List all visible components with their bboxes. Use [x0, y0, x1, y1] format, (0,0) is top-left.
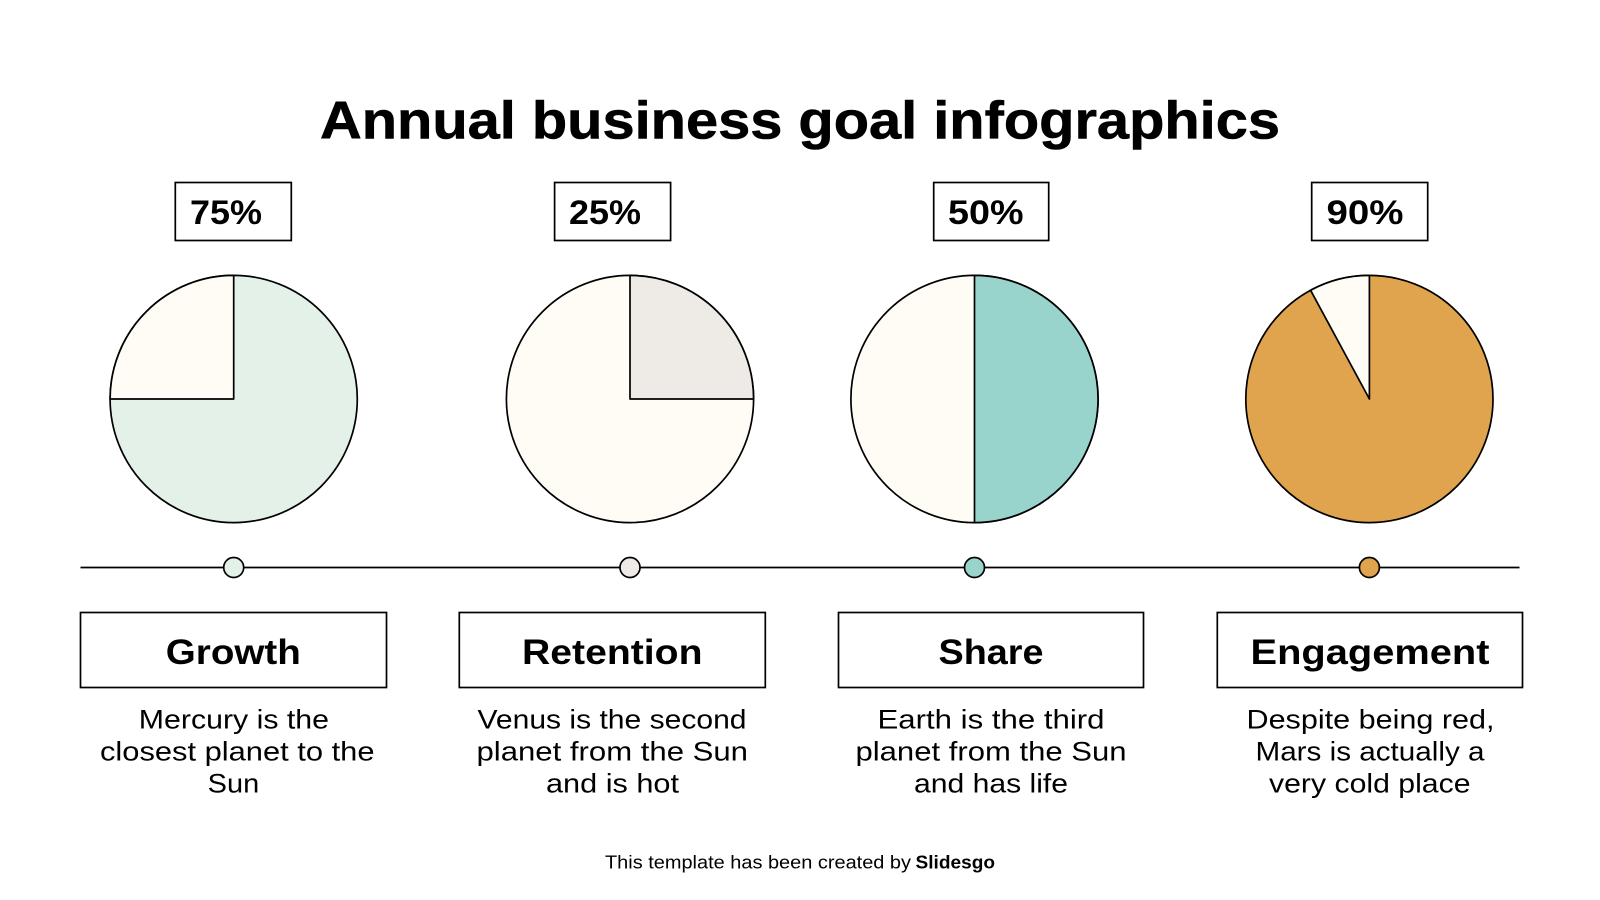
description: Venus: Venus is the second [478, 704, 746, 734]
label: Share [838, 612, 1144, 688]
percent badge: 25%: 25% [569, 194, 641, 232]
description: Mars [1246, 704, 1494, 798]
timeline [80, 558, 1520, 578]
label: Retention [459, 612, 765, 688]
description: Mercury: Mercury is the [139, 704, 329, 734]
panel: share [838, 182, 1144, 798]
label: Engagement: Engagement [1250, 633, 1490, 672]
label: Engagement [1217, 612, 1522, 688]
label: Growth [80, 612, 386, 688]
percent badge: 90% [1312, 182, 1428, 240]
marker: retention [620, 558, 640, 578]
marker: growth [224, 558, 244, 578]
description: Earth [856, 704, 1126, 798]
pie chart: 90% [1246, 275, 1493, 523]
description: Mercury [100, 704, 374, 798]
description: Venus: and is hot [546, 768, 680, 798]
description: Earth: Earth is the third [878, 704, 1104, 734]
percent badge: 50%: 50% [948, 194, 1024, 232]
percent badge: 75% [175, 182, 291, 240]
label: Share: Share [938, 633, 1044, 672]
marker: share [964, 558, 984, 578]
description: Earth: planet from the Sun [856, 736, 1126, 766]
description: Mars: very cold place [1269, 768, 1470, 798]
panel: retention [459, 182, 765, 798]
label: Retention: Retention [522, 633, 702, 672]
footer credit: This template has been created by [605, 852, 911, 872]
description: Venus [476, 704, 748, 798]
description: Venus: planet from the Sun [476, 736, 748, 766]
percent badge: 90%: 90% [1326, 194, 1404, 232]
description: Mercury: Sun [208, 768, 259, 798]
description: Earth: and has life [914, 768, 1068, 798]
pie chart: 50% [851, 275, 1098, 523]
pie chart: 25% [506, 275, 754, 523]
description: Mercury: closest planet to the [100, 736, 374, 766]
percent badge: 25% [555, 182, 671, 240]
footer credit: Slidesgo [916, 852, 995, 872]
percent badge: 50% [934, 182, 1049, 240]
description: Mars: Mars is actually a [1256, 736, 1486, 766]
description: Mars: Despite being red, [1246, 704, 1494, 734]
label: Growth: Growth [166, 633, 301, 672]
percent badge: 75%: 75% [190, 194, 262, 232]
panel: engagement [1217, 182, 1522, 798]
title: Annual business goal infographics [320, 92, 1280, 150]
marker: engagement [1359, 558, 1379, 578]
pie chart: 75% [110, 275, 357, 523]
panel: growth [80, 182, 386, 798]
